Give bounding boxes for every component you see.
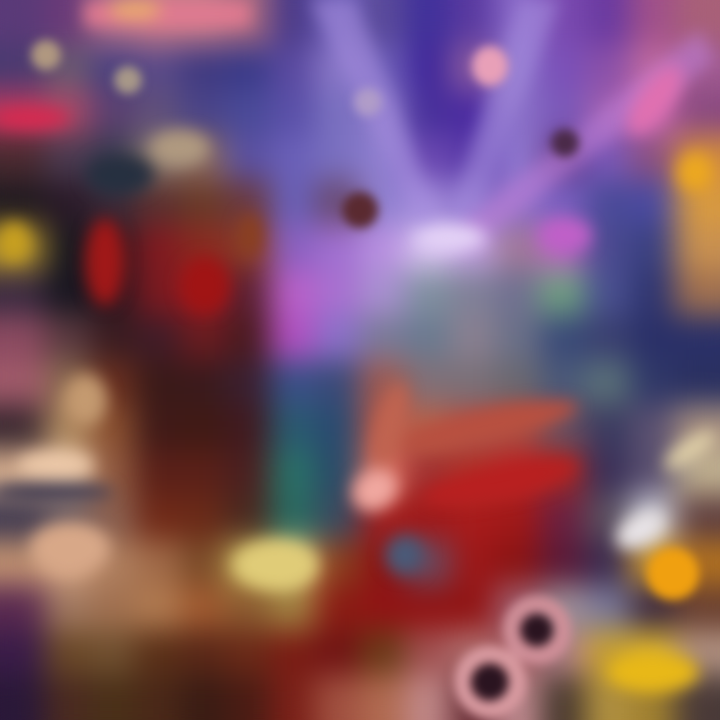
floating orbs — [31, 40, 579, 228]
bottom right details — [607, 425, 720, 692]
central glow — [414, 219, 591, 252]
top and side colour bands — [0, 0, 691, 142]
pink gear rings — [462, 604, 563, 710]
icon: orange orb — [647, 548, 699, 600]
icon: yellow bar — [607, 652, 699, 692]
figure: arm highlights — [0, 374, 317, 589]
right orange flame — [677, 152, 713, 192]
icon: pale highlights — [610, 425, 720, 556]
light rays from centre — [310, 0, 715, 250]
figure: head highlights — [0, 130, 262, 313]
red hand — [344, 379, 582, 575]
